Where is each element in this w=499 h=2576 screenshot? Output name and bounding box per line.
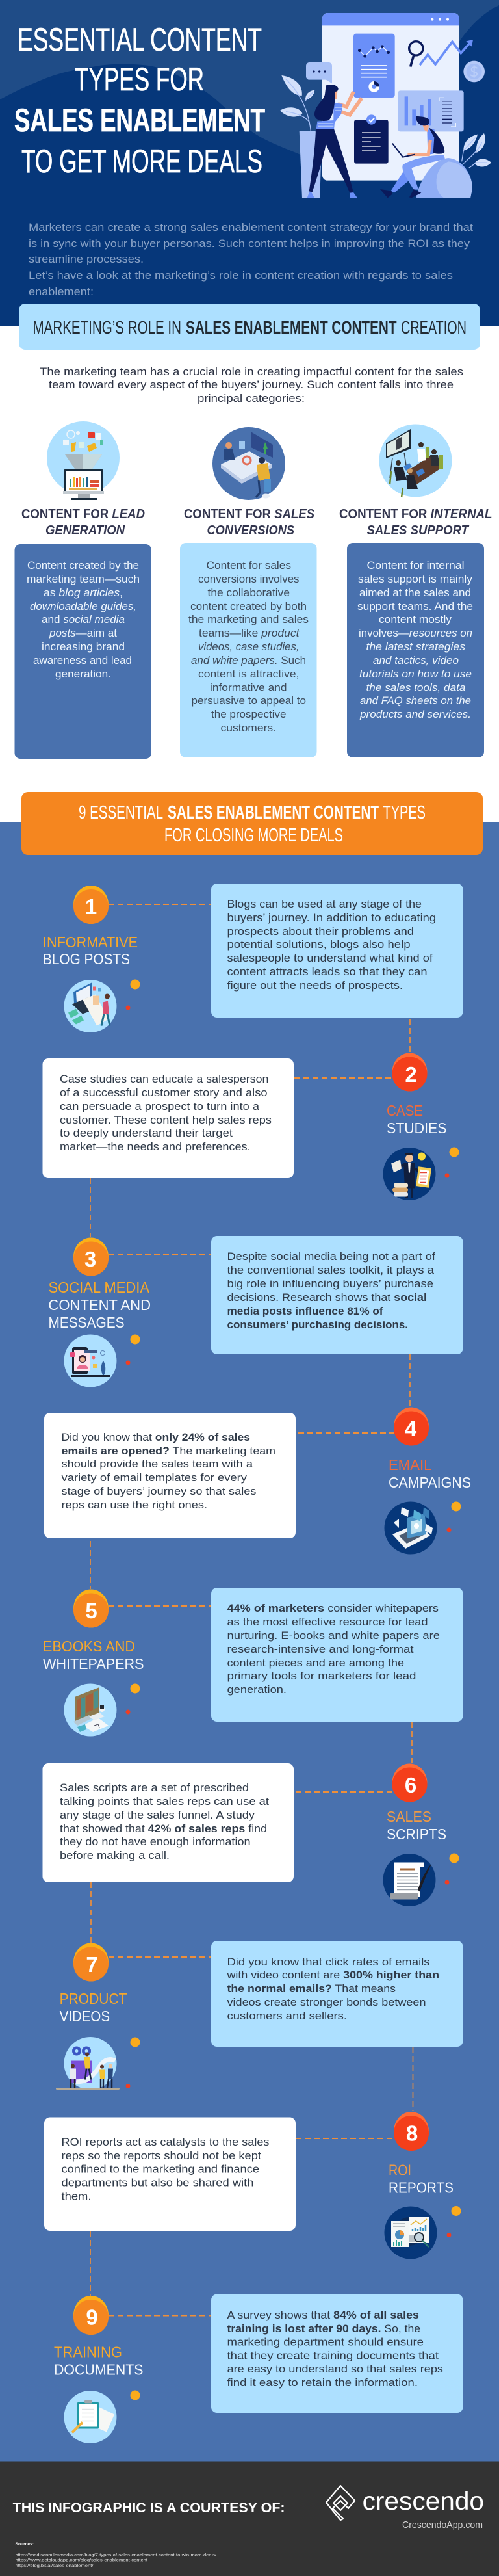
- panel: footer: [0, 2462, 499, 2576]
- title: [14, 21, 265, 179]
- text card: any stage of the sales funnel. A study: [60, 1809, 255, 1821]
- text card: media posts influence 81% of: [227, 1305, 383, 1317]
- icon: sales conversions meeting: [212, 427, 285, 500]
- logo wordmark: crescendo: [363, 2488, 484, 2516]
- label: SCRIPTS: [387, 1826, 446, 1843]
- decorative dots: [444, 1147, 459, 1178]
- text card: [211, 1941, 463, 2047]
- label: INFORMATIVE: [43, 934, 138, 951]
- text card: are easy to understand so that sales reps: [227, 2363, 443, 2375]
- column heading: CONTENT FOR SALES: [184, 507, 315, 521]
- column body: the collaborative: [208, 587, 290, 599]
- heading: 9 essential types: 9 ESSENTIAL: [79, 802, 163, 823]
- column body: increasing brand: [42, 641, 125, 653]
- label: [389, 2161, 454, 2196]
- text card: [43, 1058, 294, 1178]
- intro paragraph: The marketing team has a crucial role in creating impactful content for the sales: [40, 365, 463, 378]
- text card: videos create stronger bonds between: [227, 1996, 426, 2008]
- column body: the latest strategies: [366, 641, 465, 653]
- text card: potential solutions, blogs also help: [227, 938, 411, 951]
- label: [54, 2343, 143, 2378]
- number badge 8: [394, 2112, 429, 2151]
- column heading: [339, 507, 493, 538]
- label: [43, 1638, 144, 1672]
- number badge 9: [73, 2296, 109, 2335]
- decorative dots: [447, 1502, 461, 1532]
- label: [60, 1990, 127, 2025]
- number badge 6: [392, 1763, 428, 1802]
- text card: primary tools for marketers for lead: [227, 1670, 416, 1682]
- label: EMAIL: [389, 1456, 431, 1473]
- column body: the marketing and sales: [188, 614, 309, 625]
- icon: report charts: [385, 2207, 437, 2259]
- text card: Did you know that only 24% of sales: [61, 1431, 250, 1443]
- text card: can persuade a prospect to turn into a: [60, 1100, 260, 1112]
- intro text: [29, 221, 473, 298]
- number badge 4: [394, 1407, 429, 1446]
- heading: marketing's role: CREATION: [401, 317, 467, 337]
- sources: https://madisonmilesmedia.com/blog/7-types-of-sales-enablement-content-to-win-more-deals/: [16, 2554, 216, 2558]
- column body: persuasive to appeal to: [191, 695, 306, 707]
- number badge 7: [73, 1943, 109, 1982]
- item 5: ebooks and whitepapers: [43, 1588, 463, 1736]
- label: ROI: [389, 2161, 411, 2178]
- column body: content mostly: [379, 614, 452, 625]
- column body: [347, 543, 484, 757]
- item 6: sales scripts: [43, 1763, 459, 1906]
- icon: social media: [64, 1334, 117, 1387]
- text card: Blogs can be used at any stage of the: [227, 898, 422, 910]
- text card: buyers’ journey. In addition to educating: [227, 912, 436, 924]
- text card: big role in influencing buyers’ purchase: [227, 1278, 433, 1290]
- intro paragraph: [40, 365, 463, 404]
- text card: to deeply understand their target: [60, 1127, 233, 1139]
- text card: marketing department should ensure: [227, 2335, 424, 2348]
- number badge 8: 8: [406, 2121, 418, 2146]
- text card: nurturing. E-books and white papers are: [227, 1629, 440, 1642]
- heading: 9 essential types: FOR CLOSING MORE DEALS: [164, 825, 343, 846]
- column body: aimed at the sales and: [359, 587, 471, 599]
- text card: [44, 1413, 296, 1538]
- icon: lead generation funnel and monitor: [47, 421, 120, 500]
- column heading: [21, 507, 145, 538]
- column body: the sales tools, data: [366, 682, 465, 694]
- label: SOCIAL MEDIA: [48, 1279, 149, 1296]
- text card: them.: [61, 2190, 91, 2203]
- number badge 6: 6: [405, 1773, 416, 1797]
- number badge 2: 2: [405, 1062, 417, 1086]
- text card: Did you know that click rates of emails: [227, 1956, 430, 1968]
- heading: marketing's role: [19, 304, 480, 350]
- icon: film camera and crew: [56, 2037, 120, 2090]
- decorative dots: [126, 2038, 140, 2088]
- icon: script scroll: [383, 1854, 435, 1906]
- column heading: CONVERSIONS: [207, 523, 295, 538]
- text card: that they create training documents that: [227, 2350, 439, 2361]
- intro text: enablement:: [29, 285, 94, 298]
- text card: they do not have enough information: [60, 1835, 251, 1848]
- text card: talking points that sales reps can use at: [60, 1795, 269, 1807]
- column body: content is attractive,: [198, 668, 299, 680]
- column heading: [184, 507, 315, 538]
- text card: with video content are 300% higher than: [226, 1969, 439, 1981]
- decorative dots: [126, 1684, 140, 1714]
- text card: consumers’ purchasing decisions.: [227, 1319, 408, 1331]
- label: CONTENT AND: [48, 1296, 151, 1313]
- heading: marketing's role: SALES ENABLEMENT CONTENT: [186, 317, 396, 337]
- number badge 1: 1: [85, 895, 97, 919]
- text card: Sales scripts are a set of prescribed: [60, 1781, 249, 1794]
- item 4: email campaigns: [44, 1407, 471, 1554]
- heading: marketing's role: MARKETING’S ROLE IN: [32, 317, 181, 337]
- column heading: GENERATION: [45, 523, 125, 538]
- label: [387, 1808, 446, 1843]
- text card: [211, 1588, 463, 1722]
- sources: https://www.getcloudapp.com/blog/sales-enablement-content: [16, 2559, 147, 2563]
- text card: should provide the sales team with a: [61, 1458, 253, 1470]
- sources: https://blog.bit.ai/sales-enablement/: [16, 2564, 94, 2568]
- text card: the normal emails? That means: [227, 1982, 396, 1995]
- column body: marketing team—such: [27, 573, 140, 585]
- label: DOCUMENTS: [54, 2361, 143, 2378]
- decorative dots: [126, 1334, 140, 1365]
- text card: content attracts leads so that they can: [227, 966, 428, 978]
- text card: figure out the needs of prospects.: [227, 979, 403, 992]
- text card: emails are opened? The marketing team: [61, 1445, 275, 1457]
- title: ESSENTIAL CONTENT: [18, 21, 262, 58]
- text card: [43, 1763, 294, 1882]
- text card: [211, 2294, 463, 2413]
- text card: of a successful customer story and also: [60, 1086, 268, 1099]
- decorative dots: [447, 2206, 461, 2237]
- intro text: Marketers can create a strong sales enablement content strategy for your brand that: [29, 221, 473, 233]
- number badge 7: 7: [86, 1952, 98, 1977]
- icon: internal sales support meeting: [379, 424, 452, 497]
- number badge 3: 3: [84, 1247, 96, 1271]
- title: TYPES FOR: [75, 61, 204, 98]
- column body: conversions involves: [198, 573, 299, 585]
- column: sales conversions: [180, 507, 317, 757]
- text card: that showed that 42% of sales reps find: [60, 1822, 267, 1835]
- text card: content pieces and are among the: [227, 1657, 404, 1669]
- column body: as blog articles ,: [44, 587, 123, 599]
- column body: downloadable guides,: [30, 601, 136, 612]
- label: STUDIES: [387, 1120, 447, 1137]
- text card: prospects about their problems and: [227, 925, 414, 938]
- text card: confined to the marketing and finance: [61, 2162, 259, 2175]
- label: BLOG POSTS: [43, 951, 130, 967]
- column body: Content for sales: [207, 560, 291, 572]
- label: EBOOKS AND: [43, 1638, 135, 1655]
- number badge 9: 9: [86, 2306, 98, 2329]
- text card: A survey shows that 84% of all sales: [227, 2309, 419, 2321]
- label: SALES: [387, 1808, 431, 1825]
- column body: support teams. And the: [357, 601, 473, 612]
- number badge 2: [392, 1053, 428, 1091]
- text card: generation.: [227, 1683, 287, 1696]
- item 3: social media: [48, 1236, 463, 1387]
- logo: crescendo mark: [326, 2486, 355, 2520]
- column heading: CONTENT FOR INTERNAL: [339, 507, 493, 521]
- icon: ebooks and desk: [64, 1684, 117, 1736]
- number badge 1: [73, 886, 109, 924]
- column heading: SALES SUPPORT: [366, 523, 470, 538]
- label: REPORTS: [389, 2179, 454, 2196]
- column body: videos, case studies,: [198, 641, 299, 653]
- decorative dots: [126, 979, 140, 1010]
- icon: blog posts: [64, 980, 117, 1032]
- decorative dots: [444, 1853, 459, 1884]
- icon: case studies: [383, 1148, 435, 1200]
- label: VIDEOS: [60, 2008, 110, 2025]
- intro paragraph: principal categories:: [198, 392, 305, 404]
- sources: [16, 2543, 216, 2568]
- label: TRAINING: [54, 2343, 122, 2360]
- text card: customers and sellers.: [227, 2010, 347, 2022]
- text card: research-intensive and long-format: [227, 1643, 414, 1655]
- label: CASE: [387, 1102, 423, 1119]
- text card: customer. These content help sales reps: [60, 1114, 272, 1126]
- column body: awareness and lead: [33, 655, 132, 666]
- label: MESSAGES: [48, 1314, 125, 1331]
- website: CrescendoApp.com: [402, 2519, 483, 2530]
- heading: 9 essential types: [21, 792, 483, 855]
- text card: reps so the reports should not be kept: [61, 2149, 261, 2162]
- sources: Sources:: [16, 2543, 34, 2547]
- text card: Case studies can educate a salesperson: [60, 1073, 269, 1085]
- label: [43, 934, 138, 967]
- text card: [211, 884, 463, 1018]
- text card: as the most effective resource for lead: [227, 1616, 428, 1628]
- text card: find it easy to retain the information.: [227, 2376, 418, 2389]
- item 9: training documents: [54, 2294, 463, 2443]
- column body: involves—resources on: [359, 627, 472, 639]
- label: WHITEPAPERS: [43, 1655, 144, 1672]
- text card: reps can use the right ones.: [61, 1499, 207, 1511]
- decorative dot: [130, 2390, 140, 2400]
- column body: products and services.: [359, 709, 471, 720]
- text card: market—the needs and preferences.: [60, 1140, 251, 1153]
- column body: and social media: [42, 614, 125, 625]
- number badge 5: 5: [85, 1599, 97, 1623]
- column body: generation.: [55, 668, 111, 680]
- intro paragraph: team toward every aspect of the buyers’ journey. Such content falls into three: [49, 378, 454, 391]
- text card: salespeople to understand what kind of: [227, 952, 433, 964]
- intro text: streamline processes.: [29, 253, 144, 265]
- text card: before making a call.: [60, 1849, 170, 1861]
- heading: 9 essential types: SALES ENABLEMENT CONTENT: [168, 802, 379, 823]
- column body: tutorials on how to use: [359, 668, 472, 680]
- column body: sales support is mainly: [358, 573, 473, 585]
- column body: Content created by the: [27, 560, 139, 572]
- column body: content created by both: [190, 601, 307, 612]
- number badge 3: [73, 1238, 109, 1276]
- item 2: case studies: [43, 1053, 459, 1200]
- column body: informative and: [210, 682, 287, 694]
- text card: training is lost after 90 days. So, the: [227, 2322, 420, 2335]
- title: SALES ENABLEMENT: [14, 102, 265, 138]
- intro text: Let’s have a look at the marketing’s role in content creation with regards to sales: [29, 269, 453, 282]
- column body: and FAQ sheets on the: [360, 695, 471, 707]
- text card: the conventional sales toolkit, it plays a: [227, 1264, 435, 1276]
- label: CAMPAIGNS: [389, 1474, 471, 1491]
- label: PRODUCT: [60, 1990, 127, 2007]
- heading: 9 essential types: TYPES: [383, 802, 426, 823]
- column body: posts—aim at: [49, 627, 117, 639]
- column body: Content for internal: [366, 560, 464, 572]
- text card: 44% of marketers consider whitepapers: [227, 1602, 439, 1614]
- column body: [180, 543, 317, 757]
- column heading: CONTENT FOR LEAD: [21, 507, 145, 521]
- text card: variety of email templates for every: [61, 1471, 248, 1484]
- column body: teams—like product: [199, 627, 300, 639]
- courtesy heading: THIS INFOGRAPHIC IS A COURTESY OF:: [13, 2501, 285, 2516]
- title: TO GET MORE DEALS: [21, 143, 262, 179]
- text card: stage of buyers’ journey so that sales: [61, 1485, 256, 1497]
- column body: and white papers. Such: [191, 655, 306, 666]
- icon: email laptop: [385, 1502, 437, 1554]
- number badge 5: [73, 1589, 109, 1628]
- item 7: product videos: [56, 1941, 463, 2090]
- text card: [211, 1236, 463, 1354]
- text card: decisions. Research shows that social: [227, 1291, 427, 1304]
- column body: [14, 544, 151, 759]
- text card: [44, 2117, 296, 2231]
- column body: and tactics, video: [373, 655, 459, 666]
- text card: departments but also be shared with: [61, 2177, 253, 2188]
- column: internal sales support: [339, 507, 493, 757]
- text card: ROI reports act as catalysts to the sales: [61, 2136, 269, 2148]
- text card: Despite social media being not a part of: [227, 1250, 435, 1263]
- connector lines: [90, 904, 413, 2316]
- column body: the prospective: [211, 709, 286, 720]
- column: lead generation: [14, 507, 151, 759]
- label: [387, 1102, 447, 1137]
- intro text: is in sync with your buyer personas. Such content helps in improving the ROI as they: [29, 237, 470, 250]
- item 1: informative blog posts: [43, 884, 463, 1032]
- label: [48, 1279, 151, 1331]
- item 8: roi reports: [44, 2112, 461, 2259]
- illustration: dashboard with two people: [280, 13, 491, 198]
- column body: customers.: [221, 722, 276, 734]
- label: [389, 1456, 471, 1491]
- number badge 4: 4: [405, 1417, 417, 1441]
- panel: hero header: [0, 0, 499, 326]
- panel: marketing's role: [0, 304, 499, 822]
- panel: nine content types background: [0, 822, 499, 2462]
- icon: training clipboard: [64, 2391, 117, 2443]
